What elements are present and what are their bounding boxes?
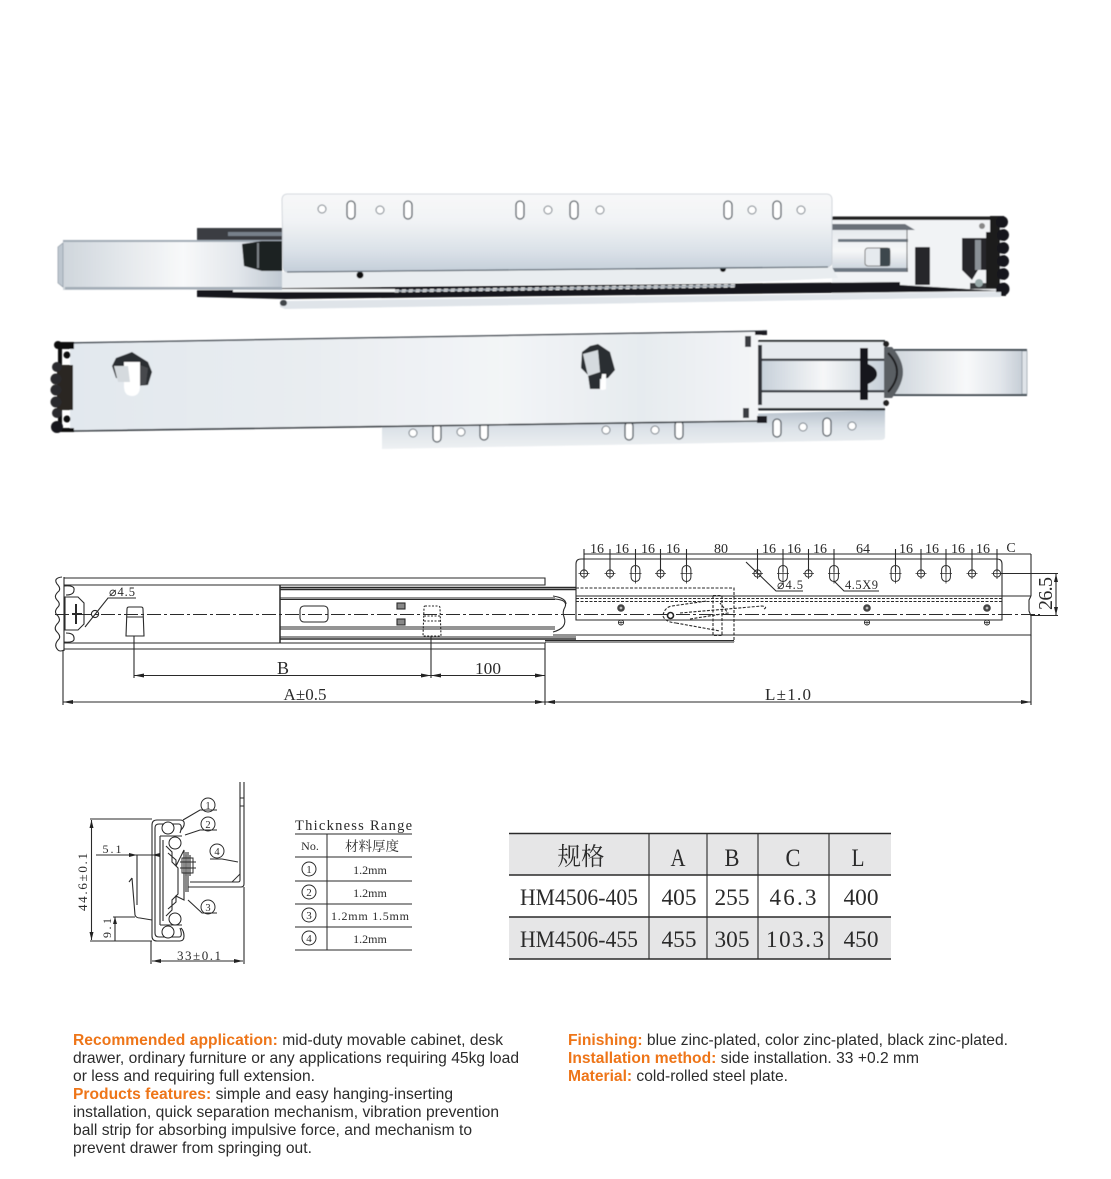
dark strip behind inner rail — [197, 228, 282, 241]
hole callout left: ⌀4.5 — [109, 585, 135, 599]
row HM4506-405 — [520, 885, 878, 910]
part number callouts — [183, 798, 238, 914]
row HM4506-405: 255 — [714, 885, 750, 910]
inner rail left — [58, 240, 282, 290]
main body — [70, 331, 767, 431]
header row: A — [670, 845, 686, 872]
dimension lines bottom — [63, 554, 1031, 705]
slot right — [423, 606, 441, 636]
outer rail right section — [832, 216, 1003, 300]
row HM4506-405: 46.3 — [770, 885, 816, 910]
section dimensions — [75, 819, 244, 964]
part number callouts: 3 — [205, 903, 211, 914]
row HM4506-455: HM4506-455 — [520, 927, 638, 952]
dimension chain top: C — [1006, 541, 1016, 556]
dimension labels: A±0.5 — [284, 685, 326, 704]
dimension labels: B — [277, 658, 289, 678]
table content: 3 — [306, 910, 312, 922]
section dimensions: 44.6±0.1 — [75, 853, 90, 911]
dimension chain top: 64 — [856, 542, 870, 557]
row HM4506-455 — [520, 927, 878, 952]
dimension chain top: 16 — [615, 542, 629, 557]
part number callouts: 1 — [205, 801, 211, 812]
inner rail outline — [280, 585, 576, 643]
description left column: ball strip for absorbing impulsive force, and mechanism to — [73, 1122, 472, 1139]
table content: 2 — [306, 887, 312, 899]
row HM4506-455: 455 — [662, 927, 696, 952]
specification table — [509, 833, 891, 959]
grid lines — [509, 833, 891, 959]
table content: 1.2mm — [353, 932, 387, 946]
description right column: Material: cold-rolled steel plate. — [568, 1068, 788, 1085]
table content: No. — [301, 839, 319, 853]
middle rail strip — [233, 266, 838, 288]
photo: bottom drawer slide — [50, 331, 1027, 449]
latch spring — [663, 596, 766, 636]
rail profile — [129, 820, 196, 941]
scalloped end cap — [50, 341, 74, 433]
table content — [301, 838, 410, 946]
table content: 4 — [306, 933, 312, 945]
section dimensions: 33±0.1 — [177, 948, 221, 963]
mounting bracket with holes — [282, 194, 832, 272]
lower rail right — [545, 596, 1031, 642]
middle rail — [758, 340, 885, 410]
table title: Thickness Range — [295, 818, 412, 834]
description left column: installation, quick separation mechanism, vibration prevention — [73, 1104, 499, 1121]
keyhole clip right — [581, 344, 615, 390]
dimension chain top: 80 — [714, 542, 728, 557]
cabinet L bracket — [188, 782, 244, 887]
row HM4506-405: HM4506-405 — [520, 885, 638, 910]
photo: top drawer slide — [58, 194, 1010, 309]
header row: L — [852, 845, 864, 872]
table content: 1 — [306, 864, 312, 876]
end stopper mechanism — [962, 216, 1010, 296]
section dimensions: 9.1 — [100, 918, 114, 938]
dimension chain top: 16 — [976, 542, 990, 557]
lower mounting bracket — [382, 410, 885, 449]
dimension chain top: 16 — [951, 542, 965, 557]
keyhole clip left — [112, 352, 152, 396]
row HM4506-455: 450 — [844, 927, 878, 952]
dimension chain top: 16 — [762, 542, 776, 557]
description right column: Installation method: side installation. 33 +0.2 mm — [568, 1050, 919, 1067]
technical drawing: side view of slide — [55, 541, 1058, 705]
section dimensions: 5.1 — [102, 842, 122, 856]
dimension chain top: 16 — [590, 542, 604, 557]
hole callouts right: ⌀4.5 — [777, 578, 803, 592]
lower rail — [197, 282, 1001, 309]
header row: B — [724, 845, 740, 872]
outer rail outline — [55, 577, 545, 651]
dimension 26.5: 26.5 — [1035, 577, 1057, 610]
description left column: or less and requiring full extension. — [73, 1068, 315, 1085]
thickness range table — [295, 818, 412, 950]
dimension chain top — [584, 541, 1031, 572]
table content: 1.2mm — [353, 886, 387, 900]
description right column — [568, 1032, 1008, 1085]
dimension chain top: 16 — [899, 542, 913, 557]
dimension chain top: 16 — [925, 542, 939, 557]
hole callouts right — [746, 562, 879, 592]
table grid — [295, 834, 412, 950]
table content: 材料厚度 — [345, 838, 399, 854]
description left column — [73, 1032, 519, 1157]
header row — [558, 843, 864, 872]
dimension labels — [277, 658, 811, 704]
description left column: Recommended application: mid-duty movable cabinet, desk — [73, 1032, 503, 1049]
inner rail right — [893, 349, 1027, 396]
description left column: prevent drawer from springing out. — [73, 1140, 312, 1157]
dimension chain top: 16 — [666, 542, 680, 557]
dimension chain top: 16 — [641, 542, 655, 557]
part number callouts: 4 — [214, 847, 220, 858]
table content: 1.2mm 1.5mm — [331, 909, 410, 923]
cross-section drawing — [75, 782, 244, 964]
description right column: Finishing: blue zinc-plated, color zinc-plated, black zinc-plated. — [568, 1032, 1008, 1049]
header row: C — [786, 845, 800, 872]
dimension chain top: 16 — [787, 542, 801, 557]
disconnect lever — [883, 341, 903, 406]
row HM4506-405: 405 — [662, 885, 696, 910]
row HM4506-455: 103.3 — [766, 927, 824, 952]
mounting bracket outline — [576, 559, 1002, 642]
table content: 1.2mm — [353, 863, 387, 877]
header row: 规格 — [558, 843, 604, 871]
slot left — [126, 607, 144, 636]
dimension 26.5 — [1001, 574, 1058, 616]
part number callouts: 2 — [205, 820, 211, 831]
center line — [55, 614, 1040, 616]
description left column: drawer, ordinary furniture or any applications requiring 45kg load — [73, 1050, 519, 1067]
description left column: Products features: simple and easy hanging-inserting — [73, 1086, 453, 1103]
row HM4506-405: 400 — [844, 885, 878, 910]
row HM4506-455: 305 — [714, 927, 750, 952]
dimension labels: 100 — [475, 659, 501, 678]
dimension labels: L±1.0 — [765, 685, 811, 704]
shaded rows — [509, 833, 891, 959]
hole callouts right: 4.5X9 — [845, 578, 878, 592]
dimension chain top: 16 — [813, 542, 827, 557]
hole callout left — [85, 585, 136, 627]
